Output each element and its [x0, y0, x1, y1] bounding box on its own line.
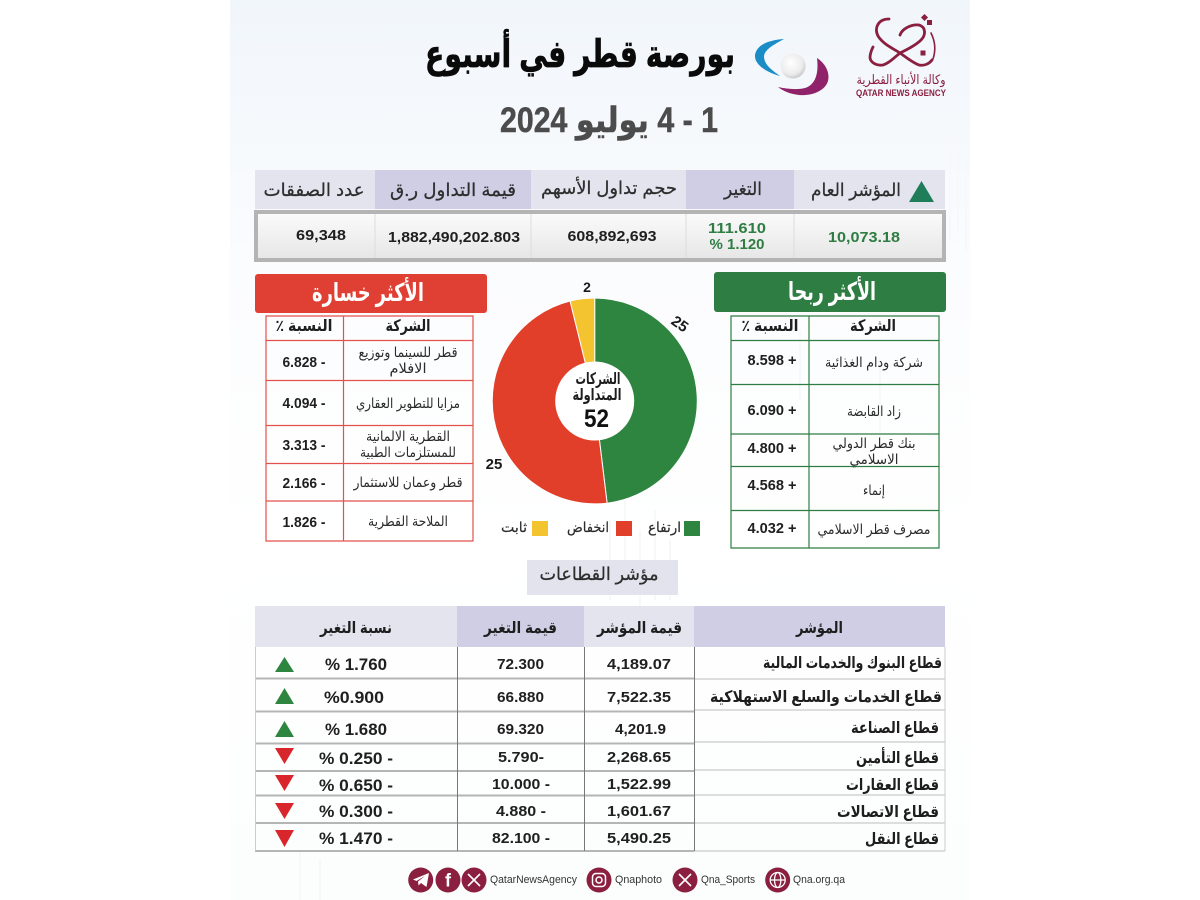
row: insurance: 5.790-	[498, 749, 544, 766]
table: top losers: مزايا للتطوير العقاري	[356, 395, 460, 412]
table: top losers: النسبة ٪	[276, 318, 332, 335]
row: industry: % 1.680	[325, 720, 387, 739]
row: telecom	[275, 802, 939, 821]
row: industry: 69.320	[497, 721, 544, 738]
table: top gainers: 8.598 +	[748, 352, 797, 369]
table: top gainers: 4.800 +	[748, 440, 797, 457]
heading: top gainers: الأكثر ربحا	[788, 276, 876, 307]
chart legend: انخفاض	[567, 519, 609, 536]
row: transport	[275, 829, 939, 848]
panel: market summary table: التغير	[723, 179, 762, 200]
row: banks: 72.300	[497, 656, 544, 673]
table: top gainers: بنك قطر الدولي	[832, 435, 916, 452]
table: top losers: قطر وعمان للاستثمار	[353, 474, 462, 491]
heading: sector index: مؤشر القطاعات	[540, 564, 658, 585]
table: top gainers: مصرف قطر الاسلامي	[818, 521, 930, 538]
row: real estate	[275, 775, 939, 795]
heading: top gainers	[714, 272, 946, 312]
panel: market summary table: 10,073.18	[828, 229, 900, 246]
table: top losers: 6.828 -	[282, 354, 326, 371]
table: top losers: 3.313 -	[282, 437, 326, 454]
table: top losers: للمستلزمات الطبية	[360, 444, 456, 461]
row: industry: قطاع الصناعة	[851, 720, 939, 737]
row: transport: قطاع النقل	[865, 831, 939, 848]
icon: telegram	[408, 868, 433, 892]
table: sector index: نسبة التغير	[319, 620, 392, 637]
row: consumer: قطاع الخدمات والسلع الاستهلاكية	[710, 689, 942, 706]
icon: up triangle	[909, 181, 934, 202]
row: real estate: 1,522.99	[607, 776, 671, 793]
table: top losers: قطر للسينما وتوزيع	[358, 344, 458, 361]
table: top gainers	[731, 316, 939, 548]
footer: social links: QatarNewsAgency	[490, 874, 577, 886]
row: real estate: % 0.650 -	[319, 776, 393, 795]
row: transport: % 1.470 -	[319, 829, 393, 848]
icon: facebook	[436, 868, 460, 892]
row: real estate: قطاع العقارات	[846, 777, 939, 794]
row: telecom: قطاع الاتصالات	[837, 804, 939, 821]
table: top losers: 1.826 -	[282, 514, 326, 531]
table: top gainers: الشركة	[850, 318, 896, 335]
panel: market summary table: 69,348	[296, 227, 346, 244]
icon: globe	[765, 868, 790, 892]
row: telecom: % 0.300 -	[319, 802, 393, 821]
panel: market summary table: 1,882,490,202.803	[388, 229, 520, 246]
row: banks	[275, 655, 942, 674]
row: consumer	[275, 688, 942, 707]
donut chart: traded companies	[486, 279, 697, 504]
logo English name: QATAR NEWS AGENCY	[856, 88, 946, 98]
table: top gainers: زاد القابضة	[847, 403, 901, 420]
center label: 52	[584, 405, 609, 433]
table: top losers: 2.166 -	[282, 475, 326, 492]
table: sector index: قيمة التغير	[483, 620, 557, 637]
row: telecom: 1,601.67	[607, 803, 671, 820]
center label: الشركات	[576, 371, 620, 388]
table: top gainers: 4.032 +	[748, 520, 797, 537]
donut chart: traded companies: 25	[668, 313, 691, 336]
row: insurance	[275, 747, 939, 768]
chart legend: ثابت	[501, 519, 527, 535]
panel: market summary table: قيمة التداول ر.ق	[390, 180, 516, 201]
table: top losers: القطرية الالمانية	[366, 428, 450, 445]
row: consumer: 66.880	[497, 689, 544, 706]
row: banks: % 1.760	[325, 655, 387, 674]
table: sector index: المؤشر	[795, 620, 843, 637]
center label	[572, 371, 622, 433]
heading: top losers: الأكثر خسارة	[312, 277, 424, 308]
row: transport: 82.100 -	[492, 830, 550, 847]
table: top losers: الافلام	[390, 360, 426, 376]
row: transport: 5,490.25	[607, 830, 671, 847]
table: top losers: 4.094 -	[282, 395, 326, 412]
row: insurance: 2,268.65	[607, 749, 671, 766]
table: top gainers: شركة ودام الغذائية	[825, 354, 923, 371]
row: consumer: %0.900	[324, 688, 384, 707]
row: banks: قطاع البنوك والخدمات المالية	[763, 655, 942, 672]
row: insurance: % 0.250 -	[319, 749, 393, 768]
icon: X	[462, 868, 486, 892]
row: telecom: 4.880 -	[496, 803, 546, 820]
row: banks: 4,189.07	[607, 656, 671, 673]
icon: instagram	[586, 868, 612, 892]
table: top losers: الشركة	[386, 318, 430, 335]
panel: market summary table: المؤشر العام	[811, 180, 901, 201]
date subtitle: 1 - 4 يوليو 2024	[500, 101, 718, 141]
center label: المتداولة	[572, 387, 622, 404]
row: real estate: 10.000 -	[492, 776, 550, 793]
icon: Qatar Stock Exchange logo	[755, 39, 829, 95]
footer: social links: Qna.org.qa	[793, 874, 846, 886]
chart legend: ارتفاع	[648, 519, 681, 536]
panel: market summary table: حجم تداول الأسهم	[541, 177, 677, 199]
donut chart: traded companies: 2	[583, 279, 591, 295]
icon: Qatar News Agency logo	[856, 14, 946, 98]
row: insurance: قطاع التأمين	[856, 747, 939, 767]
table: sector index: قيمة المؤشر	[596, 620, 682, 637]
logo Arabic name: وكالة الأنباء القطرية	[856, 71, 946, 88]
row: industry: 4,201.9	[615, 721, 666, 738]
title: بورصة قطر في أسبوع	[425, 29, 735, 76]
table: top gainers: 4.568 +	[748, 477, 797, 494]
footer: social links	[408, 868, 846, 892]
panel: market summary table: % 1.120	[710, 236, 764, 253]
table: top gainers: 6.090 +	[748, 402, 797, 419]
panel: market summary table: عدد الصفقات	[264, 180, 364, 200]
heading: top losers	[255, 274, 487, 313]
panel: market summary table	[255, 170, 945, 260]
panel: top losers	[255, 274, 487, 541]
table: top gainers: إنماء	[863, 482, 885, 499]
footer: social links: Qna_Sports	[701, 874, 755, 886]
icon: facebook: f	[445, 870, 452, 890]
table: sector index	[255, 606, 945, 851]
icon: X sports	[672, 868, 698, 892]
table: top losers: الملاحة القطرية	[368, 513, 448, 530]
row: industry	[275, 720, 939, 739]
heading: sector index	[527, 560, 678, 595]
footer: social links: Qnaphoto	[615, 874, 662, 886]
table: top gainers: الاسلامي	[850, 451, 898, 468]
donut chart: traded companies: 25	[486, 456, 502, 473]
table: top gainers: النسبة ٪	[742, 318, 798, 335]
panel: market summary table: 608,892,693	[568, 228, 656, 245]
panel: market summary table: 111.610	[708, 220, 766, 237]
row: consumer: 7,522.35	[607, 689, 671, 706]
panel: top gainers	[714, 272, 946, 548]
chart legend	[501, 519, 700, 536]
table: top losers	[266, 316, 473, 541]
